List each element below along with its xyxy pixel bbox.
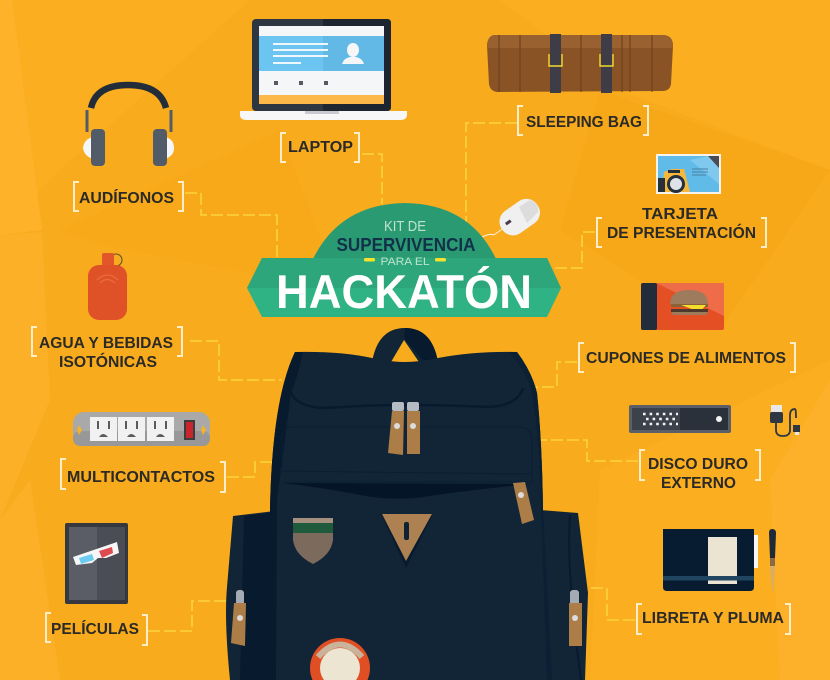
badge: shield bbox=[293, 518, 333, 564]
zipper pull left pocket bbox=[231, 590, 246, 646]
icon: food coupon bbox=[641, 283, 724, 330]
label: tarjeta de presentacion: TARJETA bbox=[642, 206, 718, 223]
zipper pulls centre bbox=[388, 402, 420, 455]
label: libreta y pluma bbox=[637, 604, 790, 634]
label: audifonos bbox=[74, 182, 183, 211]
label: tarjeta de presentacion bbox=[597, 206, 766, 247]
icon: laptop bbox=[240, 19, 407, 120]
heading: para el bbox=[364, 256, 446, 268]
handle bbox=[372, 328, 438, 362]
label: agua y bebidas isotonicas bbox=[32, 327, 182, 371]
heading: hackaton: HACKATÓN bbox=[276, 265, 532, 318]
label: cupones de alimentos bbox=[579, 343, 795, 372]
title badge bbox=[247, 203, 561, 318]
heading: supervivencia: SUPERVIVENCIA bbox=[336, 235, 476, 255]
icon: sleeping bag bbox=[487, 34, 673, 93]
icon: USB cable bbox=[770, 405, 800, 436]
pocket opening shadow bbox=[282, 483, 532, 499]
icon: tablet with 3D glasses bbox=[65, 523, 128, 604]
label: multicontactos bbox=[61, 459, 225, 492]
flap seam bbox=[291, 388, 523, 408]
icon: notebook and pen bbox=[663, 529, 776, 591]
icon: external hard drive bbox=[629, 405, 731, 433]
label: audifonos: AUDÍFONOS bbox=[79, 190, 174, 207]
main body bbox=[270, 352, 551, 680]
icon: power strip bbox=[73, 412, 210, 446]
icon: mouse bbox=[482, 194, 545, 241]
icon: headphones bbox=[83, 85, 174, 166]
heading: para el: PARA EL bbox=[380, 256, 430, 268]
upper pocket bbox=[282, 427, 532, 483]
label: laptop bbox=[281, 133, 359, 162]
label: libreta y pluma: LIBRETA Y PLUMA bbox=[642, 610, 784, 627]
title dome bbox=[313, 203, 496, 259]
label: laptop: LAPTOP bbox=[288, 139, 353, 156]
label: disco duro externo: DISCO DURO bbox=[648, 456, 748, 473]
left side pocket bbox=[226, 511, 275, 680]
label: sleeping bag bbox=[518, 106, 648, 135]
zipper pull right pocket bbox=[569, 590, 582, 646]
label: agua y bebidas isotonicas: AGUA Y BEBIDAS bbox=[39, 335, 173, 352]
label: disco duro externo: EXTERNO bbox=[661, 475, 736, 492]
backpack bbox=[226, 328, 588, 680]
label: peliculas: PELÍCULAS bbox=[51, 621, 139, 638]
label: cupones de alimentos: CUPONES DE ALIMENTOS bbox=[586, 350, 786, 367]
label: sleeping bag: SLEEPING BAG bbox=[526, 114, 642, 131]
title ribbon bbox=[247, 258, 561, 317]
label: peliculas bbox=[46, 613, 147, 645]
label: agua y bebidas isotonicas: ISOTÓNICAS bbox=[59, 353, 157, 371]
badge: round patch bbox=[310, 638, 370, 680]
heading: kit de: KIT DE bbox=[384, 218, 426, 235]
label: disco duro externo bbox=[640, 450, 760, 492]
label: multicontactos: MULTICONTACTOS bbox=[67, 469, 215, 486]
icon: business card bbox=[656, 154, 721, 194]
right side pocket bbox=[540, 510, 588, 680]
badge: triangle bbox=[381, 514, 433, 568]
icon: water bottle bbox=[88, 253, 127, 320]
label: tarjeta de presentacion: DE PRESENTACIÓN bbox=[607, 224, 756, 242]
zipper pull right bbox=[513, 482, 534, 524]
connector lines bbox=[148, 123, 638, 631]
